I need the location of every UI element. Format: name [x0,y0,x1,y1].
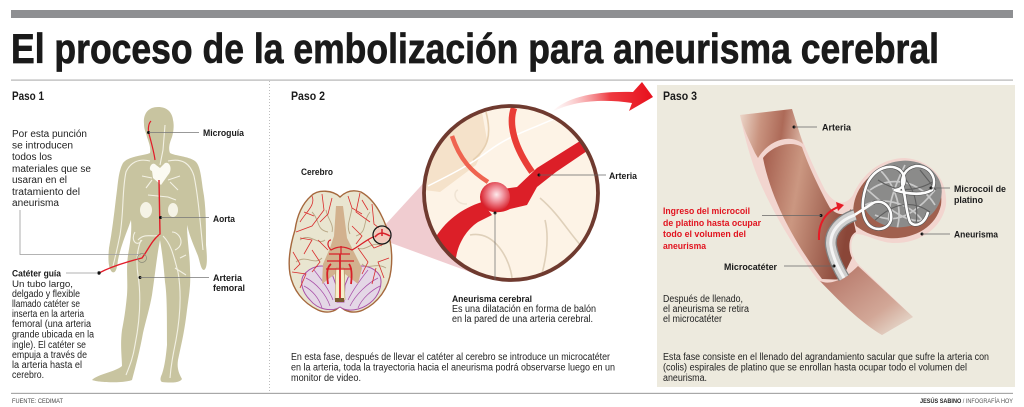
label: catéter guía: grande ubicada en la [12,330,94,340]
label: aorta [159,214,236,225]
label: cerebro: Cerebro [301,167,333,178]
header bar [11,10,1013,18]
text: punción: tratamiento del [12,187,80,198]
magnification cone [386,176,470,272]
callout: ingreso del microcoil: de platino hasta ocupar [663,218,761,229]
label: catéter guía: la arteria hasta el [12,360,82,371]
label: catéter guía [12,268,101,381]
label: catéter guía: delgado y flexible [12,289,80,300]
label: catéter guía: Un tubo largo, [12,279,73,289]
text: paso 2 description [291,352,615,384]
text: después de llenado: el aneurisma se retira [663,304,749,315]
label: aneurisma cerebral: en la pared de una arteria cerebral. [452,314,593,325]
heading: paso 2: Paso 2 [291,89,325,103]
label: arteria femoral [138,273,245,294]
panel: paso 2 [289,89,638,384]
author credit: JESÚS SABINO / INFOGRAFÍA HOY [920,396,1014,405]
text: punción: usaran en el [12,175,67,186]
label: catéter guía: llamado catéter se [12,299,80,310]
panel: paso 3 [663,89,1006,384]
label: aorta: Aorta [213,214,236,225]
label: aneurisma [920,230,999,240]
label: catéter guía: Catéter guía [12,268,62,280]
label: catéter guía: inserta en la arteria [12,309,84,320]
panel: paso 3 background [657,85,1015,387]
text: después de llenado [663,294,749,325]
label: arteria femoral: Arteria [213,273,243,284]
text: paso 2 description: monitor de video. [291,373,361,384]
label: microcoil de platino [930,184,1006,206]
text: punción: aneurisma [12,198,59,209]
text: después de llenado: el microcatéter [663,314,723,325]
callout: ingreso del microcoil [663,206,822,252]
label: microcoil de platino: platino [954,195,983,206]
heading: paso 1: Paso 1 [12,89,44,103]
label: arteria [538,171,638,182]
text: punción: todos los [12,152,52,163]
label: catéter guía: ingle). El catéter se [12,340,86,351]
brain illustration [289,191,392,312]
body silhouette with arteries [92,107,207,383]
text: paso 2 description: en la arteria, toda la trayectoria hacia el aneurisma podrá observarse luego en un [291,362,615,374]
text: punción: materiales que se [12,164,91,175]
text: paso 2 description: En esta fase, después de llevar el catéter al cerebro se introduce un microcatéter [291,352,611,363]
label: aneurisma cerebral: Aneurisma cerebral [452,294,532,305]
source credit: FUENTE: CEDIMAT [12,398,63,405]
label: microguía: Microguía [203,128,245,139]
label: aneurisma cerebral [452,212,596,325]
label: microcatéter [724,262,836,273]
label: catéter guía: empuja a través de [12,350,87,361]
magnified aneurysm lens [424,106,598,280]
artery with aneurysm and microcoil [740,109,948,335]
text: paso 3 description: Esta fase consiste en el llenado del agrandamiento sacular que sufre la arteria con [663,352,989,363]
arrow: paso 2 to paso 3 [552,82,653,112]
callout: ingreso del microcoil: todo el volumen del [663,229,746,240]
label: microguía [147,128,245,139]
heading: paso 3: Paso 3 [663,89,697,103]
label: arteria [792,122,852,134]
label: arteria femoral: femoral [213,283,245,294]
label: aneurisma cerebral: Es una dilatación en forma de balón [452,304,596,315]
label: catéter guía: cerebro. [12,370,44,381]
label: microcoil de platino: Microcoil de [954,184,1006,195]
text: punción: se introducen [12,140,73,152]
text: punción [12,129,91,209]
label: aneurisma: Aneurisma [954,230,999,240]
label: arteria: Arteria [609,171,638,182]
text: punción: Por esta punción [12,129,87,140]
panel: paso 1 [12,89,245,383]
text: paso 3 description [663,352,989,384]
label: catéter guía: femoral (una arteria [12,319,91,330]
text: paso 3 description: aneurisma. [663,373,707,384]
label: microcatéter: Microcatéter [724,262,777,273]
callout: ingreso del microcoil: Ingreso del microcoil [663,206,750,217]
text: después de llenado: Después de llenado, [663,294,743,305]
callout: ingreso del microcoil: aneurisma [663,241,707,252]
text: paso 3 description: (colis) espirales de platino que se enrollan hasta ocupar todo el volumen del [663,362,967,374]
label: arteria: Arteria [822,122,852,134]
